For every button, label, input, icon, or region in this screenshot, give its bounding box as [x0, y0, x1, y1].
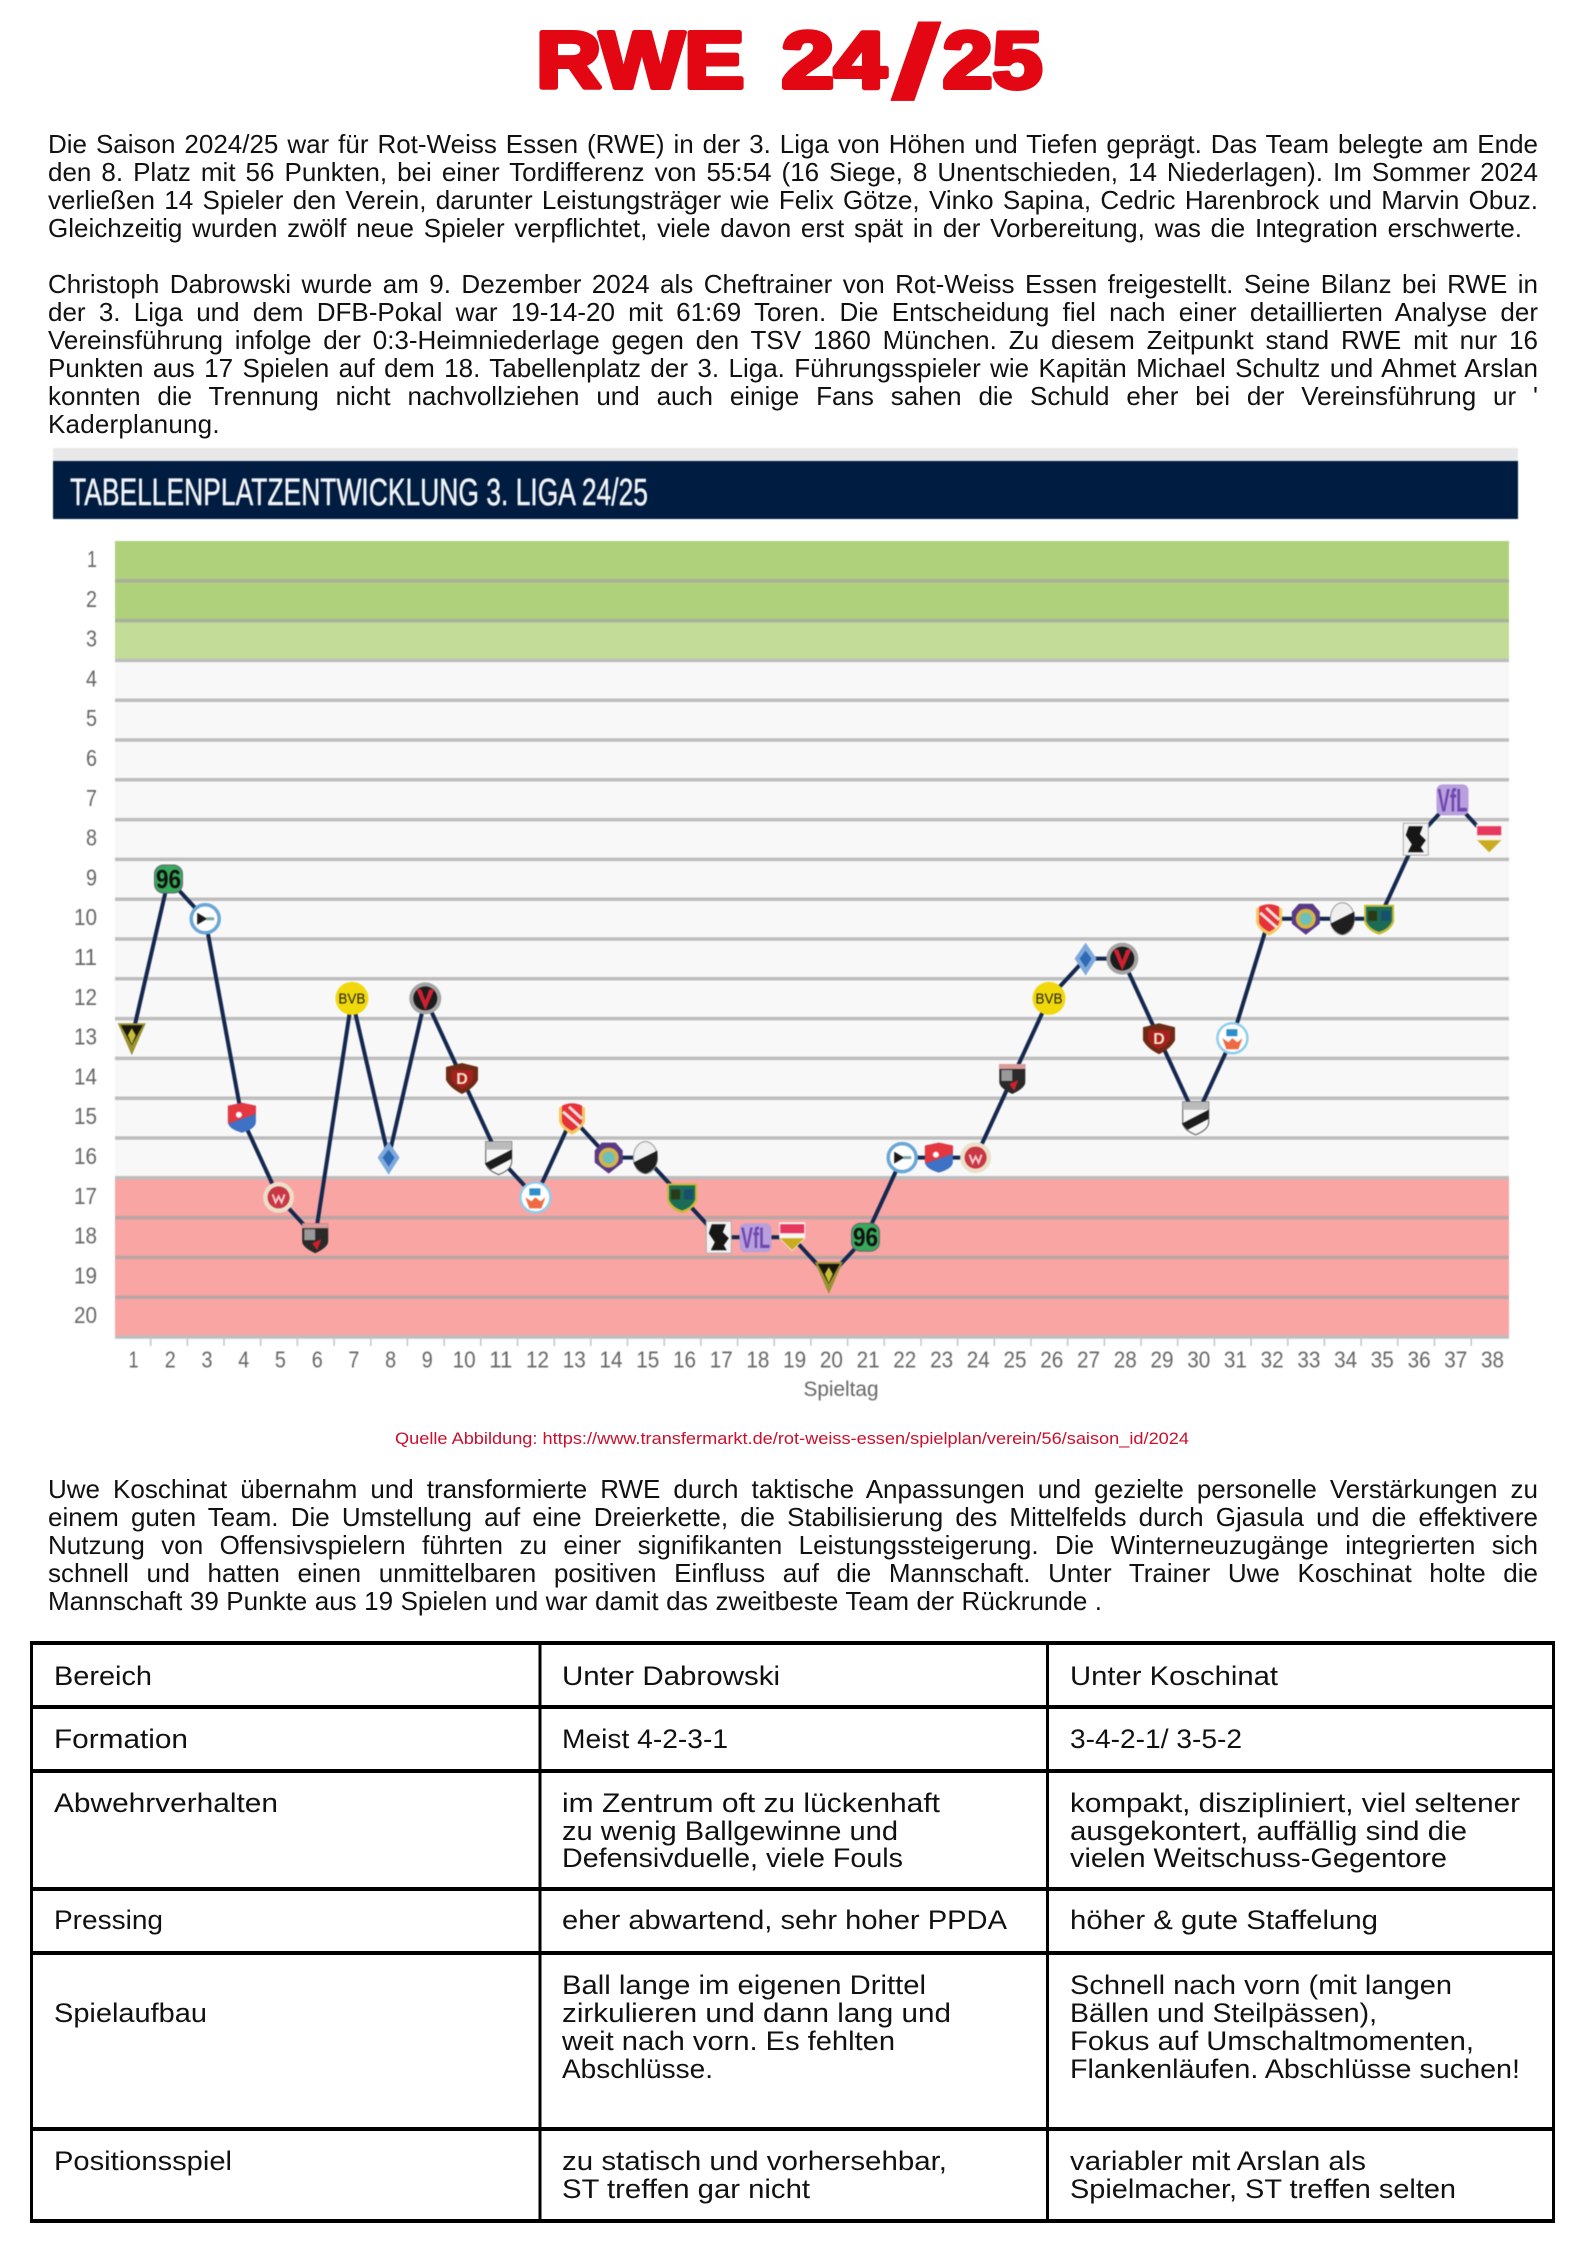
- logo md10: Dresden: D: [456, 1071, 468, 1088]
- x axis labels: matchday: 24: [967, 1346, 990, 1372]
- row: Abwehrverhalten: kompakt, diszipliniert, viel seltener: [1070, 1788, 1520, 1818]
- x axis labels: matchday: 16: [673, 1346, 696, 1372]
- y axis labels: table position: 6: [86, 745, 97, 771]
- logo md5: Wiesbaden: [263, 1182, 294, 1213]
- row: Abwehrverhalten: ausgekontert, auffällig sind die: [1070, 1816, 1467, 1846]
- x axis labels: matchday: 9: [422, 1346, 433, 1372]
- row: Spielaufbau: Bällen und Steilpässen),: [1070, 1998, 1377, 2028]
- y axis labels: table position: 9: [86, 864, 97, 890]
- logo md6: Ingolstadt: [302, 1223, 328, 1253]
- logo md16: Saarbruecken: [667, 1183, 697, 1213]
- logo md2: Hannover: 96: [156, 864, 181, 894]
- x axis labels: matchday: 25: [1004, 1346, 1026, 1372]
- x axis title: Spieltag: [804, 1378, 878, 1401]
- x axis labels: matchday: 27: [1077, 1346, 1100, 1372]
- row: Positionsspiel: Positionsspiel: [54, 2146, 232, 2176]
- title: 24: [782, 16, 887, 104]
- chart header band: TABELLENPLATZENTWICKLUNG 3. LIGA 24/25: [70, 472, 648, 514]
- x axis labels: matchday: 5: [275, 1346, 286, 1372]
- logo md13: Cottbus: [559, 1103, 585, 1135]
- row: Spielaufbau: zirkulieren und dann lang und: [562, 1998, 951, 2028]
- y axis labels: table position: 5: [86, 705, 97, 731]
- x axis labels: matchday: 14: [600, 1346, 622, 1372]
- paragraph: Dabrowski dismissal: [48, 269, 1538, 439]
- logo md7: Dortmund II: [335, 982, 368, 1015]
- y axis labels: table position: 2: [86, 586, 97, 612]
- row: Positionsspiel: ST treffen gar nicht: [562, 2174, 811, 2204]
- row: Bereich: Unter Dabrowski: [562, 1661, 780, 1691]
- x axis labels: matchday: 10: [453, 1346, 476, 1372]
- x axis labels: matchday: 22: [893, 1346, 916, 1372]
- row: Abwehrverhalten: Defensivduelle, viele Fouls: [562, 1843, 903, 1873]
- x axis labels: matchday: 37: [1444, 1346, 1467, 1372]
- y axis labels: table position: 7: [86, 785, 97, 811]
- row: Formation: Formation: [54, 1724, 188, 1754]
- logo md36: 1860 Muenchen: [1403, 823, 1428, 855]
- logo md7: Dortmund II: BVB: [338, 990, 365, 1007]
- logo md18: Osnabrueck: VfL: [741, 1222, 770, 1255]
- logo md26: Dortmund II: [1032, 982, 1066, 1015]
- logo md20: Aachen: [815, 1262, 843, 1294]
- logo md3: Bielefeld: [191, 905, 219, 933]
- x axis labels: matchday: 19: [783, 1346, 806, 1372]
- title: [536, 4, 1042, 122]
- paragraph: Koschinat turnaround: Nutzung von Offensivspielern führten zu einer signifikanten Leistungssteigerung. Die Winterneuzugänge integrierten sich: [48, 1530, 1538, 1560]
- row: Spielaufbau: Abschlüsse.: [562, 2054, 713, 2084]
- comparison table: [30, 1641, 1555, 2223]
- logo md25: Ingolstadt: [999, 1064, 1025, 1094]
- paragraph: Koschinat turnaround: Mannschaft 39 Punkte aus 19 Spielen und war damit das zweitbeste Team der Rückrunde .: [48, 1586, 1102, 1616]
- y axis labels: table position: 16: [74, 1143, 97, 1169]
- logo md35: Saarbruecken: [1364, 905, 1394, 935]
- row: Pressing: eher abwartend, sehr hoher PPDA: [562, 1905, 1007, 1935]
- row: Spielaufbau: Flankenläufen. Abschlüsse suchen!: [1070, 2054, 1520, 2084]
- row: Spielaufbau: Schnell nach vorn (mit langen: [1070, 1970, 1452, 2000]
- row: Abwehrverhalten: [54, 1788, 1520, 1873]
- paragraph: Koschinat turnaround: einem guten Team. Die Umstellung auf eine Dreierkette, die Stabilisierung des Mittelfelds durch Gjasula und die effektivere: [48, 1502, 1538, 1532]
- y axis labels: table position: 1: [87, 546, 97, 572]
- logo md21: Hannover: 96: [853, 1222, 878, 1252]
- logo md32: Cottbus: [1256, 904, 1282, 936]
- x axis labels: matchday: 35: [1371, 1346, 1394, 1372]
- title: RWE: [536, 16, 744, 104]
- row: Positionsspiel: zu statisch und vorhersehbar,: [562, 2146, 947, 2176]
- paragraph: Koschinat turnaround: [48, 1474, 1538, 1616]
- y axis labels: table position: 18: [74, 1223, 97, 1249]
- row: Spielaufbau: Spielaufbau: [54, 1998, 207, 2028]
- logo md30: Verl: [1182, 1102, 1209, 1135]
- row: Bereich: Bereich: [54, 1661, 152, 1691]
- y axis labels: table position: 4: [86, 665, 97, 691]
- logo md12: Rostock: [520, 1182, 550, 1212]
- x axis labels: matchday: 8: [385, 1346, 396, 1372]
- logo md26: Dortmund II: BVB: [1036, 990, 1062, 1007]
- logo md34: Sandhausen: [1330, 903, 1354, 935]
- paragraph: season summary: [48, 128, 1538, 242]
- row: Formation: [54, 1724, 1242, 1754]
- row: Abwehrverhalten: zu wenig Ballgewinne und: [562, 1816, 898, 1846]
- paragraph: season summary: den 8. Platz mit 56 Punkten, bei einer Tordifferenz von 55:54 (16 Siege, 8 Unentschieden, 14 Niederlagen). Im Sommer 2024: [48, 156, 1538, 186]
- x axis labels: matchday: 30: [1187, 1346, 1210, 1372]
- logo md29: Dresden: D: [1153, 1031, 1165, 1048]
- row: Abwehrverhalten: vielen Weitschuss-Gegentore: [1070, 1843, 1447, 1873]
- title: 25: [943, 16, 1042, 104]
- logo md9: Viktoria Koeln: [409, 982, 441, 1014]
- paragraph: Koschinat turnaround: Uwe Koschinat übernahm und transformierte RWE durch taktische Anpassungen und gezielte personelle Verstärkungen zu: [48, 1474, 1538, 1504]
- x axis labels: matchday: 23: [930, 1346, 953, 1372]
- x axis labels: matchday: 31: [1224, 1346, 1247, 1372]
- position line: [132, 799, 1489, 1277]
- row: Spielaufbau: weit nach vorn. Es fehlten: [561, 2026, 895, 2056]
- x axis labels: matchday: 32: [1261, 1346, 1284, 1372]
- logo md15: Sandhausen: [633, 1142, 657, 1174]
- y axis labels: table position: 13: [74, 1024, 97, 1050]
- x axis labels: matchday: 3: [202, 1346, 212, 1372]
- row: Spielaufbau: Fokus auf Umschaltmomenten,: [1070, 2026, 1474, 2056]
- x axis labels: matchday: 34: [1334, 1346, 1357, 1372]
- row: Positionsspiel: [54, 2146, 1456, 2204]
- x axis labels: matchday: 6: [312, 1346, 323, 1372]
- y axis labels: table position: 10: [74, 904, 97, 930]
- row: Pressing: höher & gute Staffelung: [1070, 1905, 1378, 1935]
- row: Bereich: Unter Koschinat: [1070, 1661, 1279, 1691]
- row: Formation: Meist 4-2-3-1: [562, 1724, 728, 1754]
- logo md11: Verl: [485, 1142, 512, 1175]
- row: Positionsspiel: variabler mit Arslan als: [1070, 2146, 1366, 2176]
- x axis labels: matchday: 18: [746, 1346, 769, 1372]
- x axis labels: matchday: 4: [238, 1346, 249, 1372]
- logo md4: Unterhaching: [228, 1103, 256, 1133]
- logo md14: Aue: [595, 1143, 623, 1174]
- image source caption: Quelle Abbildung: https://www.transfermarkt.de/rot-weiss-essen/spielplan/verein/56/saison_id/2024: [395, 1429, 1189, 1448]
- x axis labels: matchday: 1: [128, 1346, 138, 1372]
- y axis labels: table position: 17: [74, 1183, 97, 1209]
- row: Bereich: [54, 1661, 1279, 1691]
- paragraph: season summary: Gleichzeitig wurden zwölf neue Spieler verpflichtet, viele davon erst spät in der Vorbereitung, was die Integration erschwerte.: [48, 212, 1522, 242]
- logo md18: Osnabrueck: [740, 1222, 772, 1255]
- y axis labels: table position: 19: [74, 1262, 97, 1288]
- y axis labels: table position: 20: [74, 1302, 97, 1328]
- row: Positionsspiel: Spielmacher, ST treffen selten: [1070, 2174, 1456, 2204]
- logo md23: Unterhaching: [925, 1143, 953, 1173]
- row: Spielaufbau: Ball lange im eigenen Drittel: [562, 1970, 926, 2000]
- row: Pressing: [54, 1905, 1378, 1935]
- logo md33: Aue: [1292, 904, 1320, 935]
- y axis labels: table position: 8: [86, 825, 97, 851]
- chart header band: [53, 448, 1518, 519]
- logo md24: Wiesbaden: [960, 1142, 991, 1173]
- logo md37: Osnabrueck: VfL: [1438, 782, 1468, 818]
- row: Abwehrverhalten: Abwehrverhalten: [54, 1788, 278, 1818]
- y axis labels: table position: 15: [74, 1103, 97, 1129]
- paragraph: Dabrowski dismissal: Vereinsführung infolge der 0:3-Heimniederlage gegen den TSV 1860 München. Zu diesem Zeitpunkt stand RWE mit nur 16: [48, 325, 1538, 355]
- logo md10: Dresden: [446, 1063, 478, 1094]
- y axis labels: table position: [74, 546, 97, 1328]
- logo md31: Rostock: [1217, 1023, 1247, 1053]
- table grid: [30, 1641, 1555, 2223]
- logo md29: Dresden: [1143, 1023, 1175, 1054]
- x axis labels: matchday: 26: [1040, 1346, 1063, 1372]
- x axis labels: matchday: 29: [1150, 1346, 1174, 1372]
- title: /: [889, 4, 943, 122]
- x axis labels: matchday: 7: [348, 1346, 359, 1372]
- x axis labels: matchday: 38: [1481, 1346, 1504, 1372]
- x axis labels: matchday: 12: [526, 1346, 549, 1372]
- x axis labels: matchday: 17: [710, 1346, 733, 1372]
- row: Pressing: Pressing: [54, 1905, 163, 1935]
- x axis labels: matchday: [128, 1346, 1504, 1372]
- x axis labels: matchday: 20: [820, 1346, 843, 1372]
- logo md37: Osnabrueck: [1436, 782, 1468, 818]
- logo md22: Bielefeld: [888, 1144, 916, 1172]
- x axis labels: matchday: 33: [1297, 1346, 1320, 1372]
- row: Spielaufbau: [54, 1970, 1520, 2084]
- logo md19: Stuttgart II: [779, 1222, 805, 1251]
- paragraph: Dabrowski dismissal: Punkten aus 17 Spielen auf dem 18. Tabellenplatz der 3. Liga. Führungsspieler wie Kapitän Michael Schultz und Ahmet Arslan: [48, 353, 1538, 383]
- y axis labels: table position: 11: [74, 944, 97, 970]
- row: Formation: 3-4-2-1/ 3-5-2: [1070, 1724, 1242, 1754]
- logo md1: Aachen: [118, 1023, 146, 1055]
- paragraph: Dabrowski dismissal: Kaderplanung.: [48, 409, 218, 439]
- paragraph: Koschinat turnaround: schnell und hatten einen unmittelbaren positiven Einfluss auf die Mannschaft. Unter Trainer Uwe Koschinat holte die: [48, 1558, 1538, 1588]
- logo md8: Mannheim: [378, 1142, 400, 1175]
- x axis labels: matchday: 15: [636, 1346, 659, 1372]
- x axis labels: matchday: 2: [165, 1346, 176, 1372]
- paragraph: season summary: Die Saison 2024/25 war für Rot-Weiss Essen (RWE) in der 3. Liga von Höhen und Tiefen geprägt. Das Team belegte am Ende: [48, 128, 1538, 158]
- paragraph: Dabrowski dismissal: konnten die Trennung nicht nachvollziehen und auch einige Fans sahen die Schuld eher bei der Vereinsführung ur ': [48, 381, 1538, 411]
- logo md38: Stuttgart II: [1476, 824, 1502, 853]
- plot background bands: [115, 541, 1509, 1337]
- x axis labels: matchday: 36: [1408, 1346, 1431, 1372]
- x axis labels: matchday: 11: [489, 1346, 512, 1372]
- x axis labels: matchday: 21: [857, 1346, 880, 1372]
- chart: Tabellenplatzentwicklung: [53, 448, 1518, 1401]
- y axis labels: table position: 12: [74, 984, 97, 1010]
- logo md27: Mannheim: [1075, 943, 1097, 976]
- x axis labels: matchday: 13: [563, 1346, 586, 1372]
- row: Abwehrverhalten: im Zentrum oft zu lückenhaft: [562, 1788, 941, 1818]
- paragraph: season summary: verließen 14 Spieler den Verein, darunter Leistungsträger wie Felix Götze, Vinko Sapina, Cedric Harenbrock und Marvin Obuz.: [48, 184, 1538, 214]
- x axis ticks: [151, 1337, 1471, 1346]
- y axis labels: table position: 3: [86, 626, 97, 652]
- x axis labels: matchday: 28: [1114, 1346, 1137, 1372]
- logo md17: 1860 Muenchen: [706, 1221, 731, 1253]
- logo md28: Viktoria Koeln: [1106, 943, 1138, 975]
- y axis labels: table position: 14: [74, 1063, 97, 1089]
- paragraph: Dabrowski dismissal: Christoph Dabrowski wurde am 9. Dezember 2024 als Cheftrainer von Rot-Weiss Essen freigestellt. Seine Bilanz bei RWE in: [48, 269, 1538, 299]
- paragraph: Dabrowski dismissal: der 3. Liga und dem DFB-Pokal war 19-14-20 mit 61:69 Toren. Die Entscheidung fiel nach einer detaillierten Analyse der: [48, 297, 1538, 327]
